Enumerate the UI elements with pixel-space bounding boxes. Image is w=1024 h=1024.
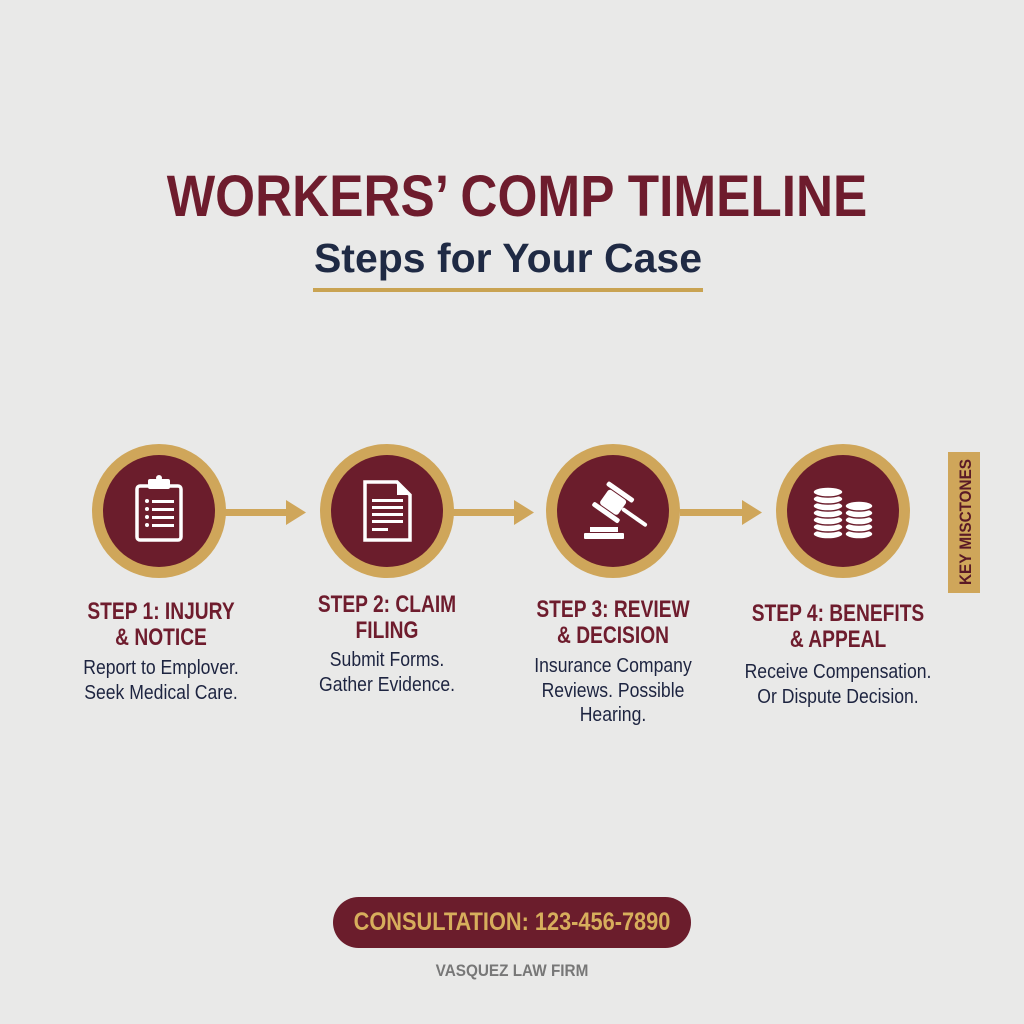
step 2 text: Submit Forms. [330, 649, 444, 671]
underline [313, 288, 703, 292]
arrow 1 [224, 500, 306, 525]
step 2 text: FILING [356, 617, 418, 644]
consultation pill: CONSULTATION: 123-456-7890 [354, 908, 670, 936]
arrow 3 [680, 500, 762, 525]
step 1 text: & NOTICE [115, 624, 207, 651]
step 1 text: STEP 1: INJURY [87, 598, 235, 625]
step 3 text: Hearing. [580, 704, 646, 726]
step 4 text: Or Dispute Decision. [757, 686, 919, 708]
step 1 text [83, 598, 239, 704]
step 4 text [745, 600, 931, 708]
step 3 text: STEP 3: REVIEW [536, 596, 690, 623]
step 4 text: & APPEAL [790, 626, 886, 653]
step 4 text: STEP 4: BENEFITS [752, 600, 924, 627]
icon: gavel circle [546, 444, 680, 578]
step 3 text: Reviews. Possible [542, 680, 684, 702]
icon: clipboard circle [92, 444, 226, 578]
consultation pill [333, 897, 691, 948]
icon: coins circle [776, 444, 910, 578]
step 2 text [318, 591, 456, 696]
step 1 text: Seek Medical Care. [84, 682, 238, 704]
icon: document circle [320, 444, 454, 578]
footer firm name: VASQUEZ LAW FIRM [436, 961, 588, 980]
step 1 text: Report to Emplover. [83, 657, 239, 679]
step 2 text: Gather Evidence. [319, 674, 455, 696]
subtitle: Steps for Your Case [314, 235, 702, 281]
side label [948, 452, 980, 593]
step 2 text: STEP 2: CLAIM [318, 591, 456, 618]
side label: KEY MISCTONES [956, 459, 975, 585]
step 3 text [534, 596, 692, 726]
arrow 2 [452, 500, 534, 525]
step 3 text: Insurance Company [534, 655, 692, 677]
step 3 text: & DECISION [557, 622, 669, 649]
step 4 text: Receive Compensation. [745, 661, 931, 683]
title: WORKERS’ COMP TIMELINE [167, 164, 867, 229]
